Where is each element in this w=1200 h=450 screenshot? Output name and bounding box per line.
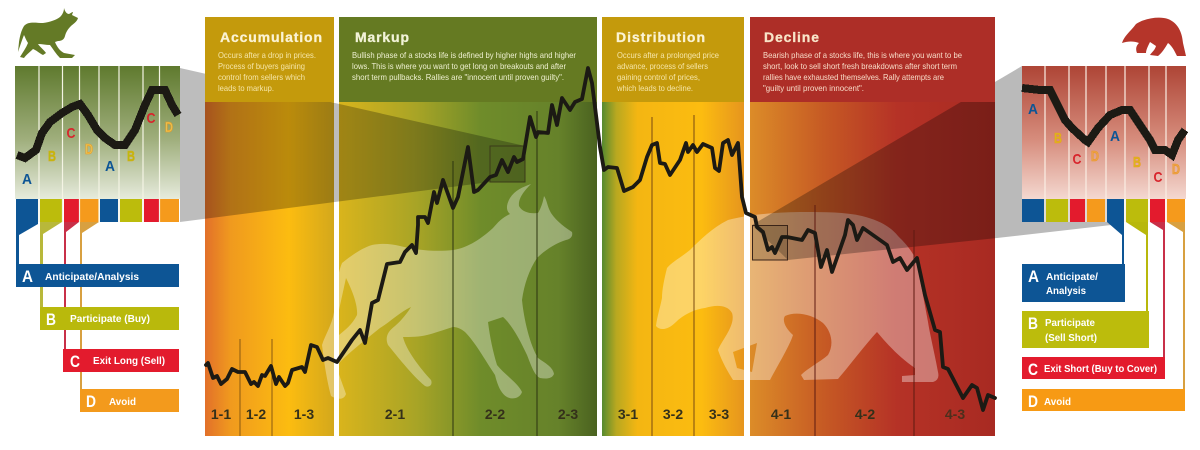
legend item D [80, 389, 179, 412]
header: accumulation: leads to markup. [218, 83, 274, 93]
phase letters: A [105, 158, 115, 175]
phase letters [22, 110, 173, 188]
legend item B [40, 307, 179, 330]
legend item A [16, 264, 179, 287]
legend item B: Participate (Buy) [70, 313, 150, 325]
header: markup: Bullish phase of a stocks life is defined by higher highs and higher [352, 50, 576, 60]
panel: left detail chart [15, 66, 180, 222]
legend item B: B [1028, 314, 1038, 333]
bear silhouette [656, 212, 938, 382]
panel: decline background [750, 17, 995, 436]
legend item B: B [46, 310, 56, 329]
header: accumulation: Accumulation [220, 29, 322, 45]
legend item A: Analysis [1046, 285, 1086, 297]
sub-stage labels: 2-1 [385, 406, 405, 422]
legend item C: C [1028, 360, 1038, 379]
phase letters: B [1133, 154, 1141, 171]
legend item A: Anticipate/ [1046, 271, 1098, 283]
header: distribution: gaining control of prices, [617, 72, 700, 82]
box: markup detail [490, 146, 525, 182]
legend item C [1022, 357, 1165, 379]
icon: bear [1122, 18, 1186, 56]
sub-stage dividers [240, 111, 914, 436]
legend item B: Participate [1045, 317, 1095, 329]
legend item D: Avoid [1044, 396, 1071, 408]
panel: accumulation background [205, 17, 334, 436]
phase letters: A [1110, 128, 1120, 145]
legend item B: (Sell Short) [1045, 332, 1097, 344]
sub-stage labels: 3-1 [618, 406, 638, 422]
sub-stage labels: 1-3 [294, 406, 314, 422]
phase letters: D [1172, 161, 1180, 178]
colour strips [1022, 199, 1185, 222]
connectors: right legend [1107, 222, 1185, 390]
phase letters: D [1091, 148, 1099, 165]
stepped price line [17, 90, 178, 158]
header: decline: "guilty until proven innocent". [763, 83, 864, 93]
phase letters: A [1028, 101, 1038, 118]
sub-stage labels: 1-2 [246, 406, 266, 422]
phase letters: C [1072, 151, 1082, 168]
sub-stage labels: 2-3 [558, 406, 578, 422]
legend item A [1022, 264, 1125, 302]
legend item D: D [1028, 392, 1038, 411]
header: distribution: advance, process of sellers [617, 61, 708, 71]
box: decline detail [752, 226, 788, 260]
wedge: zoom from decline box to right detail [752, 66, 1120, 260]
bull silhouette [322, 184, 572, 399]
phase letters: B [127, 148, 135, 165]
legend item C: Exit Long (Sell) [93, 355, 165, 367]
header: markup [339, 17, 597, 102]
header: distribution [602, 17, 744, 102]
legend item A: A [22, 267, 33, 286]
header: decline: Bearish phase of a stocks life, this is where you want to be [763, 50, 962, 60]
header: distribution: Distribution [616, 29, 705, 45]
colour strips [16, 199, 179, 222]
phase letters: A [22, 171, 32, 188]
phase letters: B [1054, 130, 1062, 147]
connectors: left legend [16, 222, 99, 390]
header: decline: Decline [764, 29, 819, 45]
header: markup: lows. This is where you want to get long on breakouts and after [352, 61, 566, 71]
sub-stage labels: 2-2 [485, 406, 505, 422]
header: accumulation: control from sellers which [218, 72, 305, 82]
header: distribution: Occurs after a prolonged price [617, 50, 719, 60]
header: distribution: which leads to decline. [616, 83, 693, 93]
header: accumulation: Occurs after a drop in prices. [218, 50, 316, 60]
header: markup: short term pullbacks. Rallies are "innocent until proven guilty". [352, 72, 564, 82]
phase letters [1028, 101, 1180, 186]
phase letters: D [85, 141, 93, 158]
header: accumulation: Process of buyers gaining [218, 61, 305, 71]
sub-stage labels: 4-1 [771, 406, 791, 422]
header: decline: short, look to sell short fresh breakdowns after short term [763, 61, 957, 71]
legend: left [16, 264, 179, 412]
sub-stage labels: 4-3 [945, 406, 965, 422]
sub-stage labels: 1-1 [211, 406, 231, 422]
header: accumulation [205, 17, 334, 102]
phase letters: C [66, 125, 76, 142]
icon: bull [18, 8, 78, 58]
legend item D [1022, 389, 1185, 411]
panel: distribution background [602, 17, 744, 436]
price line chart [206, 68, 995, 410]
legend item D: D [86, 392, 96, 411]
header: decline [750, 17, 995, 102]
sub-stage labels [211, 406, 965, 422]
phase letters: C [146, 110, 156, 127]
sub-stage labels: 3-3 [709, 406, 729, 422]
legend item A: Anticipate/Analysis [45, 271, 139, 283]
legend item C: Exit Short (Buy to Cover) [1044, 363, 1157, 375]
sub-stage labels: 3-2 [663, 406, 683, 422]
legend item A: A [1028, 267, 1039, 286]
legend: right [1022, 264, 1185, 411]
panel: right detail chart [1022, 66, 1186, 222]
phase letters: D [165, 119, 173, 136]
legend item C: C [70, 352, 80, 371]
legend item D: Avoid [109, 396, 136, 408]
legend item C [63, 349, 179, 372]
header: decline: rallies have exhausted themselves. Rally attempts are [763, 72, 944, 82]
wedge: zoom from left detail to markup box [180, 68, 525, 222]
panel: markup background [339, 17, 597, 436]
legend item B [1022, 311, 1149, 348]
phase letters: C [1154, 169, 1163, 186]
sub-stage labels: 4-2 [855, 406, 875, 422]
phase letters: B [48, 148, 56, 165]
stepped price line [1022, 88, 1185, 155]
header: markup: Markup [355, 29, 409, 45]
